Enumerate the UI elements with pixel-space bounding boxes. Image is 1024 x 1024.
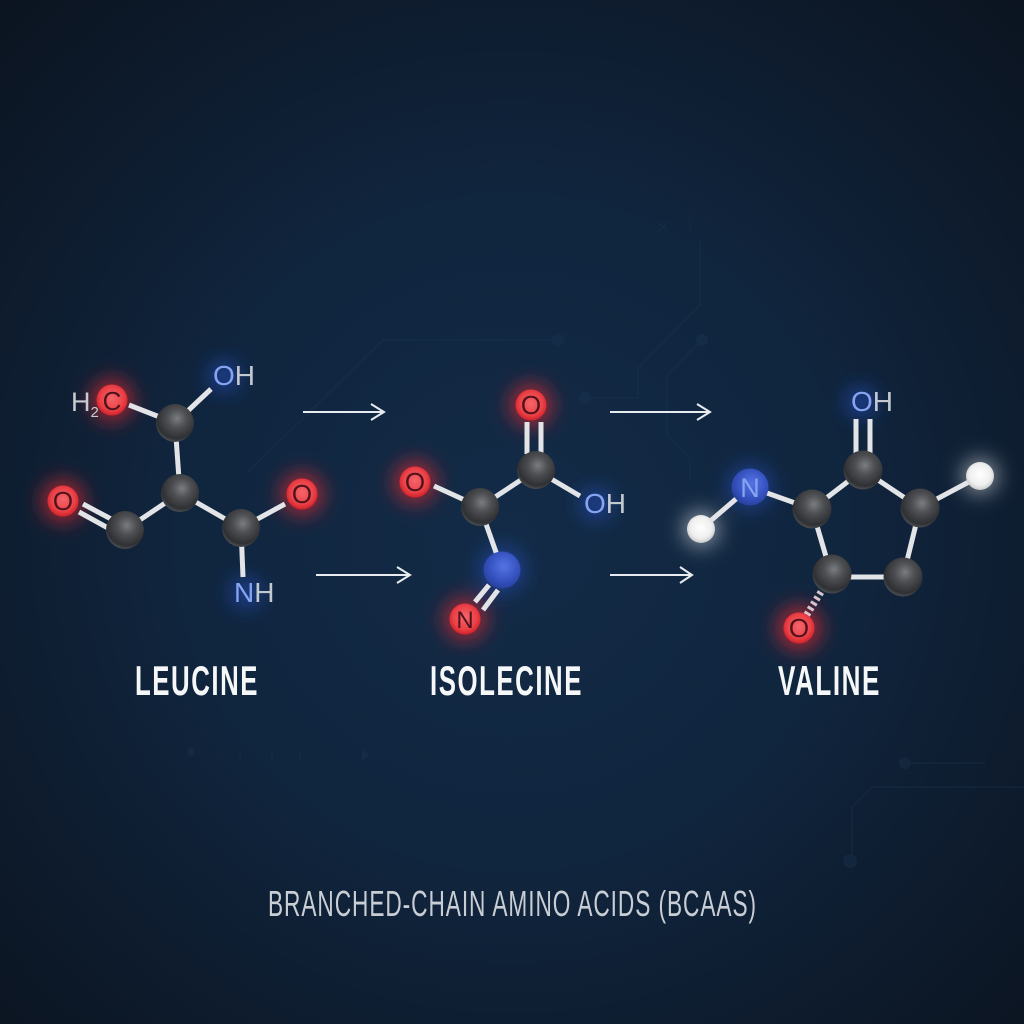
leucine bonds — [79, 389, 285, 577]
isolecine labels: O — [521, 390, 541, 420]
molecule: leucine — [42, 360, 323, 608]
leucine glows — [42, 361, 323, 608]
leucine labels: O — [53, 486, 73, 516]
leucine labels: H — [71, 387, 90, 417]
title: valine: VALINE — [778, 657, 881, 704]
title: leucine: LEUCINE — [135, 657, 259, 704]
molecule: isolecine — [394, 384, 626, 640]
isolecine labels: O — [405, 467, 425, 497]
valine labels: OH — [851, 386, 893, 417]
valine labels: N — [740, 473, 760, 503]
arrow: isolecine to valine top — [610, 404, 710, 420]
arrow: isolecine to valine bottom — [610, 567, 692, 583]
leucine atoms — [48, 384, 318, 549]
valine atoms — [687, 450, 994, 644]
arrow: leucine to isolecine top — [303, 404, 384, 420]
valine glows — [683, 387, 998, 650]
isolecine labels: OH — [584, 488, 626, 519]
isolecine bonds — [434, 422, 580, 610]
valine bonds — [701, 419, 980, 577]
leucine labels — [53, 360, 312, 608]
isolecine atoms — [400, 390, 555, 634]
valine wedge bond — [806, 592, 821, 616]
leucine labels: C — [103, 386, 121, 416]
faint circuit pattern — [187, 218, 1024, 868]
arrow: leucine to isolecine bottom — [316, 567, 410, 583]
isolecine labels — [405, 390, 626, 634]
subtitle: BRANCHED-CHAIN AMINO ACIDS (BCAAS) — [268, 883, 757, 924]
leucine labels: OH — [213, 360, 255, 391]
leucine labels: NH — [234, 577, 274, 608]
isolecine labels: N — [456, 607, 474, 634]
leucine labels: O — [292, 479, 312, 509]
isolecine glows — [394, 384, 611, 640]
valine labels: O — [789, 613, 809, 643]
title: isolecine: ISOLECINE — [430, 657, 583, 704]
leucine labels: 2 — [90, 404, 99, 421]
valine labels — [740, 386, 893, 643]
molecule: valine — [683, 386, 998, 650]
